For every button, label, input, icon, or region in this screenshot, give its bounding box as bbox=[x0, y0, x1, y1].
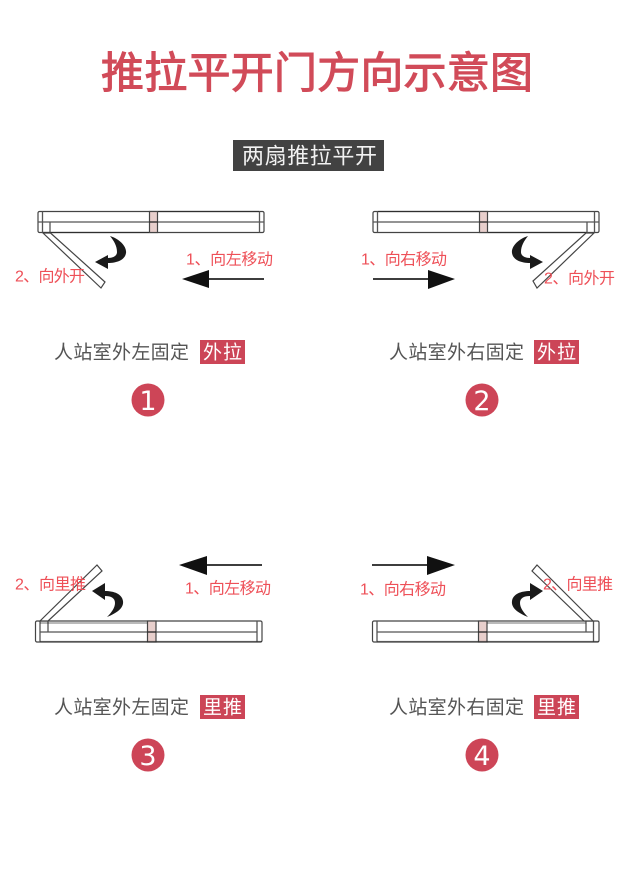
door leaf 4 bbox=[532, 565, 593, 621]
door leaf 3 bbox=[40, 565, 102, 621]
door track 1 bbox=[38, 212, 264, 232]
caption 4: 人站室外右固定 bbox=[389, 696, 524, 718]
number badge 2: 2 bbox=[473, 386, 491, 417]
number badge 3: 3 bbox=[139, 741, 157, 772]
door track 4 bbox=[372, 621, 599, 642]
label: move right 2: 1、向右移动 bbox=[361, 250, 447, 268]
caption 2: 人站室外右固定 bbox=[389, 342, 524, 364]
number badge 1: 1 bbox=[139, 386, 157, 417]
curved arrow 2 bbox=[512, 236, 543, 269]
label: push inward 3: 2、向里推 bbox=[15, 576, 86, 594]
panel: diagram 2 bbox=[361, 212, 615, 417]
curved arrow 1 bbox=[95, 236, 126, 269]
label: move left 1: 1、向左移动 bbox=[186, 250, 273, 268]
label: open outward 2: 2、向外开 bbox=[544, 270, 615, 288]
tag 3: 里推 bbox=[203, 696, 242, 718]
curved arrow 3 bbox=[92, 583, 123, 617]
panel: diagram 3 bbox=[15, 556, 271, 772]
door leaf 2 bbox=[533, 233, 594, 288]
caption 3: 人站室外左固定 bbox=[54, 696, 189, 718]
curved arrow 4 bbox=[512, 583, 543, 617]
subtitle badge: 两扇推拉平开 bbox=[242, 144, 377, 168]
panel: diagram 1 bbox=[15, 212, 273, 417]
straight arrow 2 bbox=[373, 270, 455, 289]
label: open outward 1: 2、向外开 bbox=[15, 268, 85, 286]
label: move left 3: 1、向左移动 bbox=[185, 580, 271, 598]
straight arrow 1 bbox=[182, 270, 264, 288]
door leaf 1 bbox=[43, 233, 105, 288]
label: push inward 4: 2、向里推 bbox=[543, 576, 613, 594]
title: 推拉平开门方向示意图 bbox=[101, 50, 533, 98]
tag 1: 外拉 bbox=[203, 342, 242, 364]
straight arrow 3 bbox=[179, 556, 262, 575]
door track 3 bbox=[36, 621, 262, 642]
straight arrow 4 bbox=[372, 556, 455, 575]
door track 2 bbox=[373, 212, 599, 232]
number badge 2 bbox=[466, 384, 498, 417]
number badge 1 bbox=[132, 384, 164, 417]
number badge 3 bbox=[132, 738, 164, 772]
panel: diagram 4 bbox=[360, 556, 613, 772]
number badge 4 bbox=[466, 738, 498, 772]
caption 1: 人站室外左固定 bbox=[54, 342, 189, 364]
tag 4: 里推 bbox=[537, 696, 576, 718]
tag 2: 外拉 bbox=[537, 342, 576, 364]
label: move right 4: 1、向右移动 bbox=[360, 580, 446, 598]
number badge 4: 4 bbox=[473, 741, 491, 772]
